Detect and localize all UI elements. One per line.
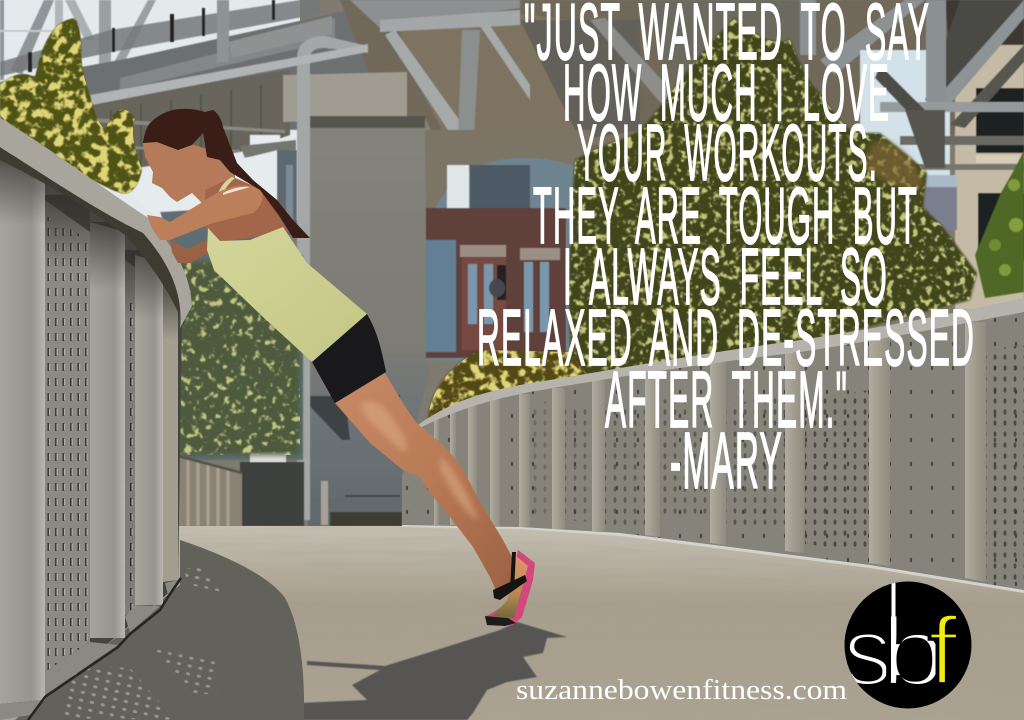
back and chest skin — [205, 177, 290, 242]
truss over building — [925, 0, 1024, 105]
railing base strip — [402, 525, 1024, 593]
shadow of woman on ground — [300, 622, 567, 720]
perforated panels — [530, 345, 1024, 585]
left post 3 — [135, 255, 163, 605]
handrail — [0, 118, 192, 328]
shadow body — [15, 540, 304, 720]
left post 4 — [163, 282, 178, 582]
dappled sunlight — [57, 665, 175, 720]
shadow of left railing on ground — [15, 540, 304, 720]
sbf logo: f — [928, 596, 958, 705]
left post 1 — [0, 160, 45, 704]
near arm — [147, 185, 262, 240]
shorts — [312, 314, 386, 403]
perforated panel 1 — [45, 200, 90, 672]
sbf logo: b — [881, 597, 945, 706]
tree: central foliage behind quote — [560, 15, 980, 385]
tree: foliage at right edge — [975, 150, 1024, 298]
tree: upper left foliage — [0, 15, 145, 200]
fence along deck — [0, 0, 320, 76]
deck band — [0, 0, 520, 130]
truss members against sky — [11, 0, 54, 75]
lower bracing — [300, 395, 400, 440]
tank strap — [215, 177, 235, 204]
leg — [335, 373, 512, 593]
left metal railing — [0, 118, 192, 720]
sbf logo: s — [843, 597, 892, 706]
right side beige underside and steel — [340, 0, 1024, 160]
tree: yellow shrub behind right railing — [426, 349, 587, 418]
left post 2 — [90, 222, 125, 638]
handrail — [418, 298, 1024, 428]
concrete bridge pier and arch — [90, 36, 590, 526]
far arm — [170, 240, 208, 263]
perforated panel 2 — [125, 260, 136, 616]
base plates — [0, 580, 178, 720]
woman doing incline push-up — [143, 109, 535, 626]
dark backing — [0, 150, 182, 720]
sky and building, upper right — [860, 0, 1024, 310]
shoulder highlight — [223, 187, 250, 195]
shoe — [485, 550, 535, 626]
sky gap under deck — [106, 150, 297, 262]
sbf logo — [843, 582, 972, 708]
tree: left tree behind railing — [180, 260, 304, 460]
railing panel body — [402, 302, 1024, 590]
right curved railing — [402, 298, 1024, 593]
website url: suzannebowenfitness.com — [516, 675, 847, 706]
quote text: -MARY — [670, 416, 783, 505]
long pipe along deck — [90, 44, 368, 105]
distant bridge deck and truss, left — [0, 0, 520, 130]
background buildings through the arch — [426, 158, 590, 365]
tank top — [207, 227, 367, 362]
arch ring — [425, 130, 590, 250]
railing posts — [434, 322, 986, 582]
toothed bracket under rail — [0, 147, 184, 326]
quote text — [477, 0, 975, 505]
underside of deck — [0, 70, 296, 172]
ground walkway — [0, 526, 1024, 720]
shade under handrail — [0, 155, 178, 340]
curb edge — [28, 578, 181, 720]
fence and wall behind left railing — [178, 255, 304, 526]
bollard — [321, 481, 328, 525]
vertical drain pipe — [297, 36, 368, 520]
hair and ponytail — [143, 109, 310, 238]
face and neck — [143, 142, 235, 203]
